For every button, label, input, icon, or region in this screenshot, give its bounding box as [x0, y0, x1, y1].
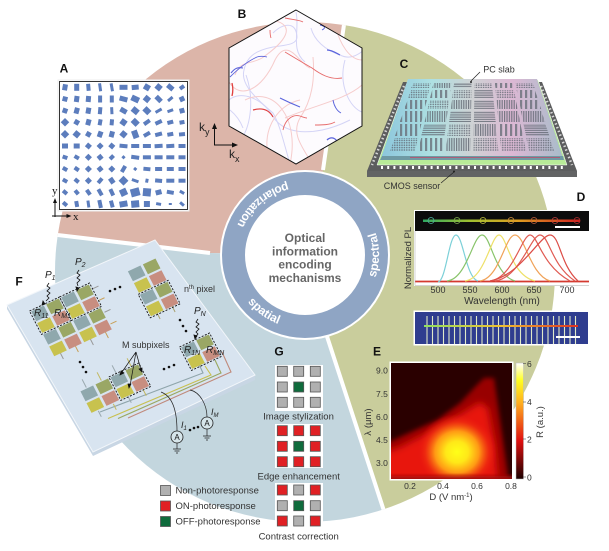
label: PC slab: PC slab	[483, 64, 515, 74]
D axis labels: 550	[462, 285, 478, 295]
panel A: metasurface grid	[52, 62, 189, 223]
colour bar: 0	[527, 472, 532, 482]
F labels: P	[194, 306, 201, 317]
F labels: n	[184, 284, 189, 294]
blue nanostructures	[61, 83, 186, 208]
F labels: th	[189, 285, 194, 291]
label: spatial: spatial	[248, 298, 281, 324]
E axis labels: 0.6	[471, 481, 483, 491]
k axes	[199, 120, 240, 164]
E axis labels: 9.0	[376, 366, 388, 376]
label: CMOS sensor: CMOS sensor	[384, 181, 440, 191]
photonic crystal pattern	[390, 83, 554, 151]
colour bar: 4	[527, 397, 532, 407]
emission image strip	[415, 211, 589, 231]
sector: spatial	[55, 235, 383, 522]
CMOS base	[367, 82, 577, 177]
colour bar: R (a.u.)	[535, 406, 546, 438]
F labels: P	[75, 257, 82, 268]
grid: image stylization	[275, 365, 323, 411]
F labels: 1N	[191, 350, 201, 357]
E axis labels: λ (μm)	[363, 408, 374, 436]
E axis labels: 6.0	[376, 412, 388, 422]
F labels: R	[34, 308, 41, 319]
E axis labels	[363, 366, 517, 503]
letter D: D	[577, 190, 586, 204]
D axis labels	[403, 227, 575, 307]
F labels	[34, 257, 225, 357]
ammeters: 1	[184, 426, 187, 432]
xy axes	[52, 185, 79, 223]
F labels: 11	[41, 313, 49, 320]
pixel array top left	[30, 280, 122, 362]
sector: polarization	[58, 22, 344, 254]
colour bar	[516, 359, 546, 482]
letter C: C	[400, 57, 409, 71]
E axis labels: 3.0	[376, 458, 388, 468]
caption: contrast correction: Contrast correction	[259, 532, 339, 542]
F labels: 2	[81, 262, 86, 269]
legend: Non-photoresponse	[176, 486, 259, 496]
xy axes: y	[52, 185, 58, 197]
center title: Optical	[285, 231, 325, 245]
grid: edge enhancement	[275, 424, 323, 468]
F labels: R	[206, 345, 213, 356]
PC slab	[381, 79, 563, 158]
letter A: A	[60, 62, 69, 76]
ammeters: I	[211, 407, 214, 417]
substrate plate	[7, 240, 255, 456]
xy axes: x	[73, 211, 79, 223]
E axis labels: 0.4	[437, 481, 449, 491]
heat map image	[391, 363, 512, 479]
D axis labels: Wavelength (nm)	[464, 296, 540, 307]
central ring	[220, 170, 390, 340]
panel F: device schematic	[7, 240, 255, 456]
D axis labels: 500	[430, 285, 446, 295]
F labels: M subpixels	[122, 340, 170, 350]
D axis labels: 650	[526, 285, 542, 295]
E axis labels: )	[470, 492, 473, 503]
F labels: MN	[213, 350, 225, 357]
device image strip	[414, 310, 590, 346]
ammeters: A	[204, 419, 210, 428]
E axis labels: D (V nm	[429, 492, 464, 503]
F labels: P	[45, 270, 52, 281]
pixel N	[180, 333, 222, 370]
k axes: y	[205, 127, 210, 137]
light inputs	[42, 270, 199, 339]
label: polarization: polarization	[238, 180, 288, 227]
panel G: response patterns	[160, 344, 340, 542]
E axis labels: 0.8	[505, 481, 517, 491]
pixel array bottom	[76, 355, 154, 420]
PL spectra chart	[415, 231, 589, 286]
center title: mechanisms	[269, 271, 342, 285]
F labels: R	[54, 308, 61, 319]
colour bar: 2	[527, 434, 532, 444]
legend: OFF-photoresponse	[176, 516, 261, 528]
letter G: G	[274, 344, 284, 358]
pixel array top right	[127, 258, 183, 322]
ammeters: A	[174, 433, 180, 442]
sector: spectral	[322, 25, 555, 510]
ellipsis dots	[79, 286, 199, 431]
panel E: heat map	[363, 344, 546, 503]
caption: edge enhancement: Edge enhancement	[257, 472, 340, 482]
label: CMOS sensor	[384, 170, 455, 191]
k axes: k	[229, 147, 235, 161]
green layer	[377, 80, 567, 165]
k axes: k	[199, 120, 205, 134]
D axis labels: 600	[494, 285, 510, 295]
F labels: pixel	[194, 284, 215, 294]
E axis labels: -1	[464, 493, 470, 499]
wires	[100, 352, 231, 418]
E axis labels: 0.2	[404, 481, 416, 491]
panel B: hexagonal map	[199, 7, 364, 164]
legend	[160, 486, 261, 528]
panel C: chip on CMOS sensor	[367, 57, 577, 191]
colour bar: 6	[527, 359, 532, 369]
letter B: B	[238, 7, 247, 21]
center title: information	[272, 244, 338, 258]
background circle sectors	[55, 22, 555, 522]
letter E: E	[373, 344, 381, 358]
M subpixel arrows	[120, 352, 142, 388]
E axis labels: 7.5	[376, 389, 388, 399]
ammeters: I	[181, 420, 184, 430]
label: spectral: spectral	[367, 233, 380, 277]
center title: encoding	[278, 258, 332, 272]
legend: ON-photoresponse	[176, 501, 256, 512]
F labels: 1	[52, 275, 56, 282]
grid: contrast correction	[275, 483, 323, 527]
D axis labels: Normalized PL	[403, 227, 414, 289]
k axes: x	[235, 154, 240, 164]
ammeters: M	[214, 413, 219, 419]
E axis labels: 4.5	[376, 435, 388, 445]
F labels: R	[184, 345, 191, 356]
ammeters	[161, 390, 219, 453]
F labels: M1	[61, 313, 71, 320]
F labels: N	[201, 311, 207, 318]
label: PC slab	[470, 64, 515, 83]
caption: image stylization: Image stylization	[263, 412, 334, 422]
letter F: F	[15, 274, 23, 288]
D axis labels: 700	[559, 285, 575, 295]
panel D: spectra	[403, 190, 590, 346]
